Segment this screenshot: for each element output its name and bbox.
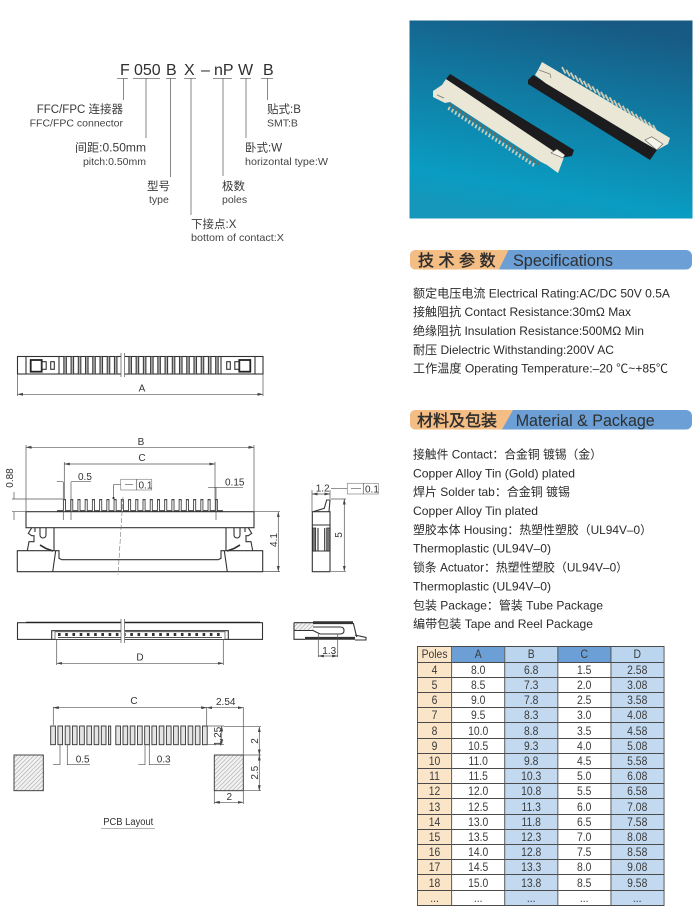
dimension 0.5 pitch <box>57 472 92 520</box>
label: type: type <box>149 194 169 206</box>
tolerance box 0.1 side: 0.1 <box>365 484 379 495</box>
dimension table: 3.0 <box>577 710 591 722</box>
part number code: B <box>166 62 177 79</box>
dimension C and 2.54: 2.54 <box>216 697 236 708</box>
dimension table: ... <box>580 893 589 905</box>
dimension table: 5.58 <box>627 756 647 768</box>
tolerance box 0.1 <box>112 479 153 499</box>
dimension table: 3.08 <box>627 680 647 692</box>
label: bottom contact <box>191 218 284 244</box>
specifications list: 绝缘阻抗 Insulation Resistance:500MΩ Min <box>413 323 644 338</box>
part number code: B <box>263 62 274 79</box>
label: pitch <box>75 142 146 168</box>
dimension pad width 0.3 <box>138 745 171 766</box>
dimension B: B <box>138 437 145 448</box>
material and package list: 焊片 Solder tab：合金铜 镀锡 <box>413 484 570 499</box>
dimension 4.1 <box>254 512 280 572</box>
dimension table <box>417 646 664 906</box>
specifications list: 工作温度 Operating Temperature:–20 ℃~+85℃ <box>413 361 668 376</box>
label: horizontal type: 卧式:W <box>245 142 282 155</box>
label: pitch: pitch:0.50mm <box>83 156 146 168</box>
latches <box>40 545 240 551</box>
PCB layout caption: PCB Layout <box>103 817 153 828</box>
label: poles: poles <box>222 194 247 206</box>
dimension table: 2.0 <box>577 680 591 692</box>
dimension 1.2: 1.2 <box>316 484 330 495</box>
dimension 1.25: 1.25 <box>213 726 224 746</box>
dimension table: 14.0 <box>468 847 488 859</box>
material and package list <box>413 446 652 631</box>
dimension table: 7 <box>432 710 437 722</box>
dimension table: 13.0 <box>468 817 488 829</box>
material and package heading <box>410 410 692 430</box>
dimensions 2 and 2.5 <box>224 727 261 791</box>
dimension pad width 0.3: 0.3 <box>157 755 171 766</box>
part number code: F <box>120 62 130 79</box>
dimension table: 11.3 <box>521 802 541 814</box>
part number code: W <box>238 62 254 79</box>
specifications list: 耐压 Dielectric Withstanding:200V AC <box>413 343 614 357</box>
dimension 0.15 <box>208 478 245 520</box>
dimension pad pitch 0.5 <box>53 745 90 766</box>
dimensions 2 and 2.5: 2.5 <box>250 765 261 780</box>
dimension table: 4.58 <box>627 726 647 738</box>
dimension table: B <box>528 649 535 661</box>
dimension table: 4.5 <box>577 756 591 768</box>
dimension table: 9.58 <box>627 878 647 890</box>
dimension table: 4.08 <box>627 710 647 722</box>
dimension table: 12.3 <box>521 832 541 844</box>
dimension A: A <box>139 384 146 395</box>
dimension table: 11.8 <box>521 817 541 829</box>
dimension table: 13 <box>429 802 440 814</box>
dimension pad width 2 <box>214 791 243 804</box>
dimension table: 11 <box>429 771 440 783</box>
dimension table: 5 <box>432 680 437 692</box>
dimension table: 6.0 <box>577 802 591 814</box>
dimension table: 13.8 <box>521 878 541 890</box>
dimension table: 8.0 <box>577 862 591 874</box>
label: bottom contact: 下接点:X <box>191 218 237 231</box>
dimension table: 10.3 <box>521 771 541 783</box>
drawing: lower view <box>18 619 262 665</box>
dimension table: 7.3 <box>524 680 538 692</box>
part number code: nP <box>214 62 234 79</box>
specifications heading <box>410 250 692 270</box>
dimension C <box>64 453 215 500</box>
label: bottom contact: bottom of contact:X <box>191 232 284 244</box>
material and package list: Copper Alloy Tin plated <box>413 504 538 518</box>
specifications list <box>413 285 670 376</box>
dimension table: 5.0 <box>577 771 591 783</box>
dimension table: 9 <box>432 741 437 753</box>
material and package heading: Material & Package <box>516 411 655 430</box>
specifications list: 额定电压电流 Electrical Rating:AC/DC 50V 0.5A <box>413 285 670 300</box>
dimension 1.25 <box>207 726 224 746</box>
dimension table: 15 <box>429 832 440 844</box>
drawing: cross section <box>294 623 366 657</box>
dimension table: 6.58 <box>627 786 647 798</box>
specifications heading: 技术参数 <box>418 252 500 270</box>
dimension table: 7.5 <box>577 847 591 859</box>
dimension table: ... <box>527 893 535 905</box>
dimension table: 12.5 <box>468 802 488 814</box>
label: connector <box>30 102 124 130</box>
dimension table: 5.5 <box>577 786 591 798</box>
dimension table: 3.5 <box>577 726 591 738</box>
dimension 0.5 pitch: 0.5 <box>78 472 92 483</box>
dimension C and 2.54: C <box>130 696 138 707</box>
dimension 0.88: 0.88 <box>5 468 16 488</box>
dimension table: 18 <box>429 878 440 890</box>
dimension table: 7.8 <box>524 695 538 707</box>
drawing: side view <box>312 483 379 572</box>
dimension table: C <box>580 649 588 661</box>
dimension table: D <box>634 649 641 661</box>
material and package heading: 材料及包装 <box>417 412 497 430</box>
dimension table: 8.58 <box>627 847 647 859</box>
dimension table: 8 <box>432 726 437 738</box>
dimension 1.3: 1.3 <box>322 646 337 657</box>
label: connector: FFC/FPC connector <box>30 118 124 130</box>
left leg <box>27 528 54 551</box>
dimension 4.1: 4.1 <box>269 533 280 547</box>
contact pins <box>57 506 223 511</box>
dimension B <box>26 437 254 511</box>
part number code: X <box>184 62 195 79</box>
dimension A <box>18 374 263 396</box>
product photo <box>410 20 692 218</box>
dimension table: 10 <box>429 756 440 768</box>
dimension table: 6.8 <box>524 665 538 677</box>
base <box>17 551 263 572</box>
dimension C and 2.54 <box>53 696 243 755</box>
label: SMT: SMT:B <box>267 118 298 130</box>
dimension table: 17 <box>429 862 440 874</box>
label: horizontal type <box>245 142 328 168</box>
label: horizontal type: horizontal type:W <box>245 156 328 168</box>
drawing: top view <box>18 353 263 396</box>
dimension table: 9.08 <box>627 862 647 874</box>
dimension table: 11.5 <box>468 771 488 783</box>
part number breakdown diagram <box>30 62 328 244</box>
dimension table: 9.5 <box>471 710 485 722</box>
label: pitch: 间距:0.50mm <box>75 142 146 155</box>
dimension table: 9.8 <box>524 756 538 768</box>
material and package list: Thermoplastic (UL94V–0) <box>413 542 551 556</box>
dimension 0.15: 0.15 <box>225 478 245 489</box>
dimension table: 6.08 <box>627 771 647 783</box>
material and package list: Copper Alloy Tin (Gold) plated <box>413 466 575 480</box>
label: type <box>147 179 170 206</box>
dimension table: 13.5 <box>468 832 488 844</box>
dimension table: 7.08 <box>627 802 647 814</box>
dimension table: 8.3 <box>524 710 538 722</box>
material and package list: 接触件 Contact：合金铜 镀锡（金） <box>413 446 602 461</box>
dimension table: A <box>475 649 482 661</box>
dimension 0.88 <box>5 468 63 520</box>
dimension table: 12.8 <box>521 847 541 859</box>
dimension table: 8.5 <box>471 680 485 692</box>
drawing: PCB layout <box>14 696 261 828</box>
dimension table: 13.3 <box>521 862 541 874</box>
dimension D: D <box>136 653 144 664</box>
dimension D <box>57 639 223 665</box>
dimension table: 6 <box>432 695 437 707</box>
dimension table: 7.58 <box>627 817 647 829</box>
label: SMT: 贴式:B <box>267 102 301 116</box>
dimension table: 1.5 <box>577 665 591 677</box>
dimension table: ... <box>474 893 482 905</box>
dimension table: 2.58 <box>627 665 647 677</box>
specifications list: 接触阻抗 Contact Resistance:30mΩ Max <box>413 304 631 319</box>
dimension pad pitch 0.5: 0.5 <box>76 755 90 766</box>
dimension table: 14 <box>429 817 440 829</box>
dimension table: 10.0 <box>468 726 488 738</box>
dimension table: 16 <box>429 847 440 859</box>
dimension table: 9.3 <box>524 741 538 753</box>
dimension table: 7.0 <box>577 832 591 844</box>
leader lines <box>124 78 268 215</box>
material and package list: Thermoplastic (UL94V–0) <box>413 579 551 593</box>
dimension table: 8.08 <box>627 832 647 844</box>
contact pads <box>51 726 207 745</box>
dimension table: 10.5 <box>468 741 488 753</box>
part number code: 050 <box>134 62 161 79</box>
label: poles: 极数 <box>222 179 245 193</box>
dimension table: 2.5 <box>577 695 591 707</box>
label: SMT <box>267 102 301 130</box>
dimension table: 15.0 <box>468 878 488 890</box>
connector right <box>528 62 670 160</box>
label: connector: FFC/FPC 连接器 <box>37 102 123 116</box>
material and package list: 锁条 Actuator：热塑性塑胶（UL94V–0） <box>413 560 628 575</box>
dimension table: 12 <box>429 786 440 798</box>
dimension table: 5.08 <box>627 741 647 753</box>
part number code <box>117 62 274 79</box>
right leg <box>226 528 253 551</box>
dimension table: 14.5 <box>468 862 488 874</box>
dimension C: C <box>138 453 146 464</box>
label: poles <box>222 179 247 206</box>
material and package list: 塑胶本体 Housing：热塑性塑胶（UL94V–0） <box>413 522 652 537</box>
dimension table: 4.0 <box>577 741 591 753</box>
dimension table: Poles <box>422 649 448 661</box>
dimensions 2 and 2.5: 2 <box>250 738 261 744</box>
dimension table: 11.0 <box>468 756 488 768</box>
part number code: – <box>201 62 210 79</box>
material and package list: 包装 Package：管装 Tube Package <box>413 597 603 612</box>
dimension table: ... <box>430 893 439 905</box>
dimension 5: 5 <box>334 532 345 538</box>
specifications heading: Specifications <box>513 252 613 270</box>
label: type: 型号 <box>147 179 170 193</box>
ground pad left <box>14 755 43 791</box>
dimension table: 4 <box>432 665 437 677</box>
dimension table: 9.0 <box>471 695 485 707</box>
dimension pad width 2: 2 <box>227 792 233 803</box>
dimension table: 8.5 <box>577 878 591 890</box>
dimension table: 8.0 <box>471 665 485 677</box>
dimension table: 6.5 <box>577 817 591 829</box>
connector left <box>433 74 574 173</box>
dimension table: ... <box>633 893 642 905</box>
dimension table: 10.8 <box>521 786 541 798</box>
dimension table: 12.0 <box>468 786 488 798</box>
tolerance box 0.1: 0.1 <box>138 480 153 491</box>
drawing: front view <box>5 437 280 575</box>
ground pad right <box>214 755 243 791</box>
dimension table: 8.8 <box>524 726 538 738</box>
dimension table: 3.58 <box>627 695 647 707</box>
material and package list: 编带包装 Tape and Reel Package <box>413 616 593 631</box>
